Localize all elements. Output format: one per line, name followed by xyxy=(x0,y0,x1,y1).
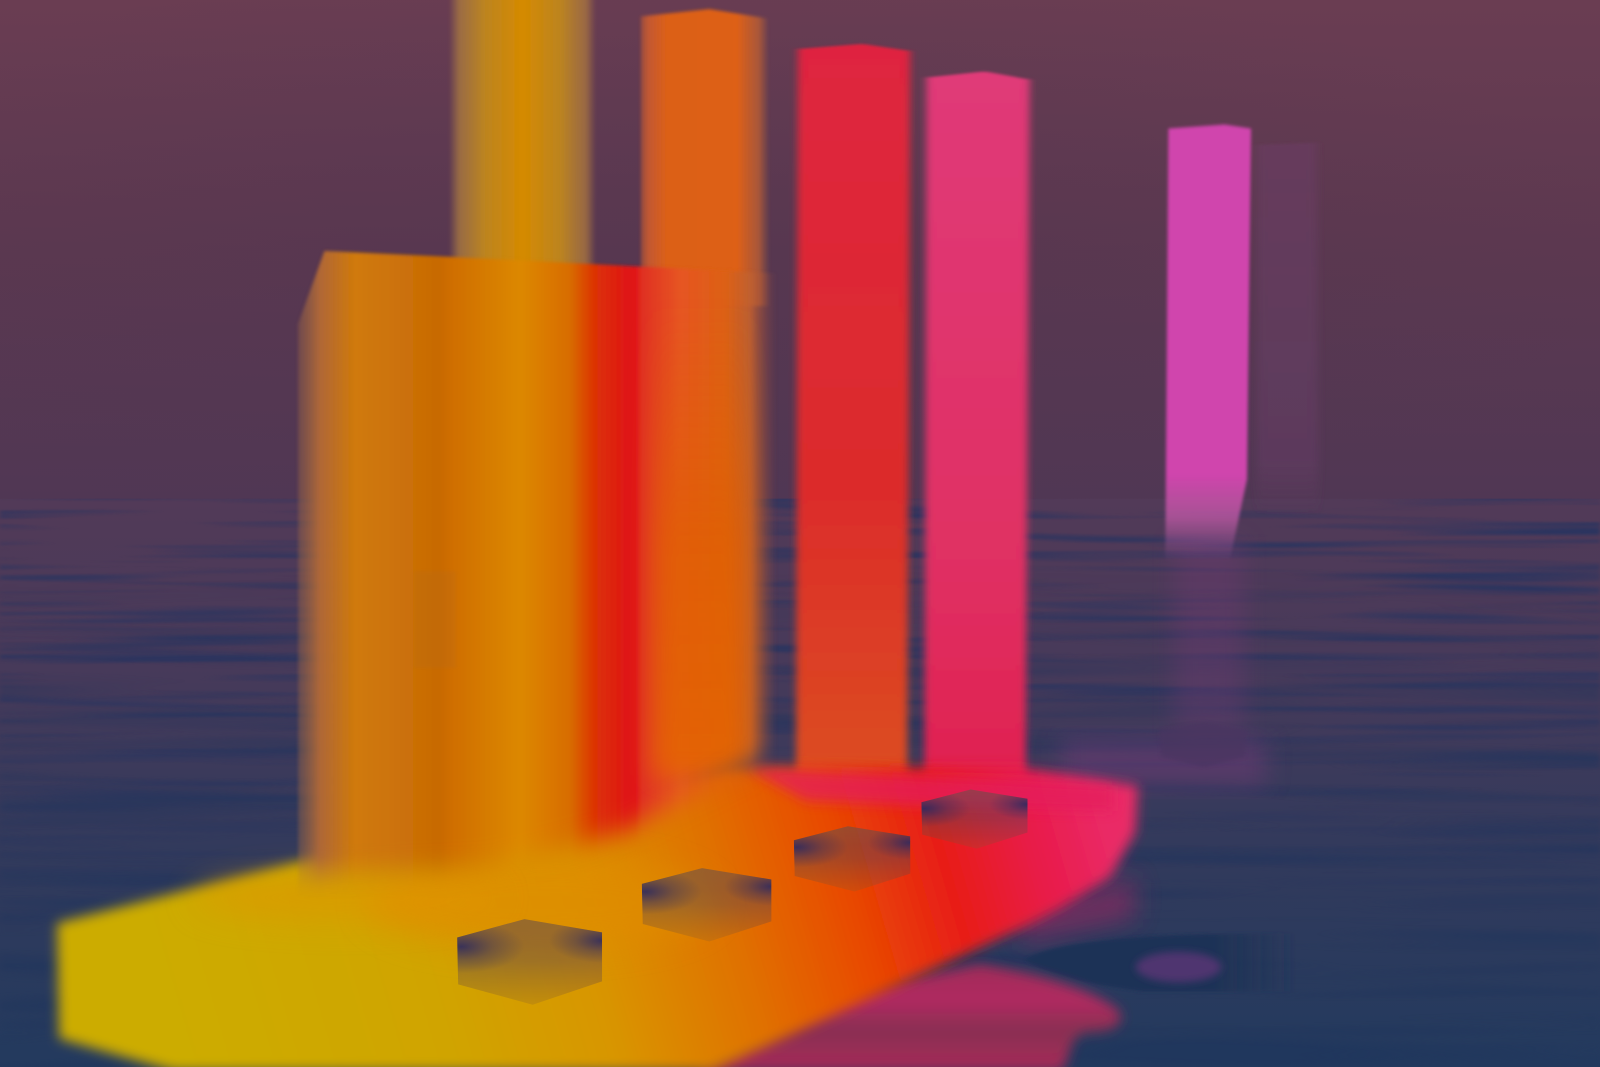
marker 3: translucent hexagon xyxy=(746,825,953,892)
bar 4: pink bar xyxy=(924,71,1030,791)
marker 2: translucent hexagon xyxy=(589,867,819,942)
bar 5: magenta bar xyxy=(1165,124,1251,561)
water reflections of the bars xyxy=(694,541,1296,1067)
bar 1: amber bar xyxy=(449,0,596,286)
marker 5: faint hexagon in the distance xyxy=(1159,722,1247,767)
marker 1: translucent hexagon xyxy=(398,918,655,1005)
marker 4: translucent hexagon xyxy=(878,789,1066,849)
bar 6: faint violet bar xyxy=(1257,143,1318,515)
bar 2: orange bar xyxy=(641,9,769,306)
background: rippled water xyxy=(0,499,1600,1067)
base platform xyxy=(57,767,1138,1067)
background: hazy plum sky xyxy=(0,0,1600,505)
bar 3: red bar xyxy=(796,44,910,801)
large front bar xyxy=(298,251,776,898)
